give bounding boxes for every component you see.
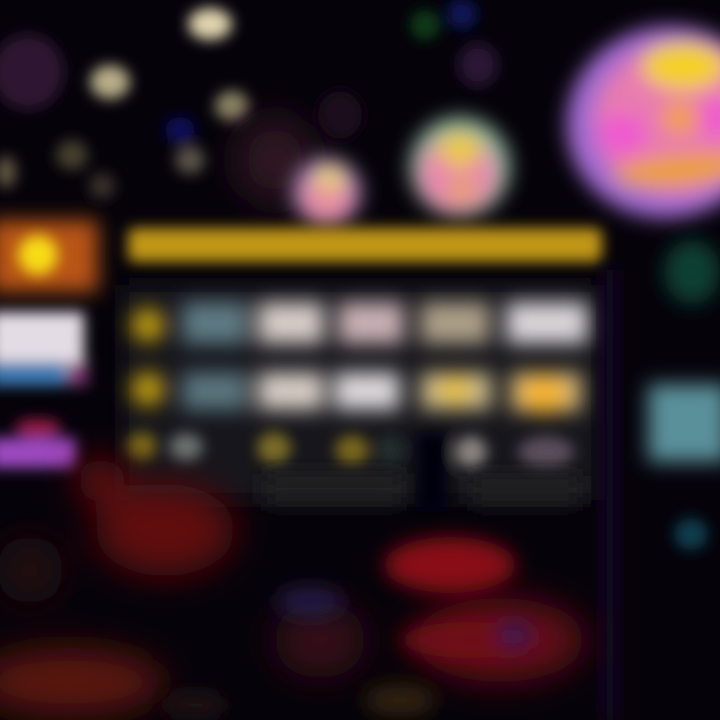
small balloon sign — [293, 158, 361, 226]
right green light — [664, 240, 720, 304]
row 2 of reel cells — [131, 372, 582, 414]
white screen — [0, 312, 88, 386]
red seats, lower area — [0, 458, 585, 716]
large neon sign, top right — [546, 4, 720, 240]
right small teal light — [674, 518, 708, 550]
orange top panel — [0, 220, 98, 292]
bright red seat — [163, 537, 540, 717]
dim purple haze behind balloons — [235, 116, 315, 204]
right teal screen — [648, 384, 720, 462]
reel grid panel — [122, 285, 598, 500]
right machine edge strip — [603, 270, 617, 720]
row 3 of reel cells — [127, 432, 574, 512]
yellow light — [18, 235, 58, 275]
background bokeh lights — [0, 0, 498, 199]
yellow marquee bar — [128, 228, 602, 262]
purple panel — [0, 419, 76, 468]
left slot machine — [0, 220, 98, 468]
large balloon sign — [410, 117, 510, 217]
row 1 of reel cells — [131, 302, 588, 344]
lower button panels — [264, 474, 580, 504]
